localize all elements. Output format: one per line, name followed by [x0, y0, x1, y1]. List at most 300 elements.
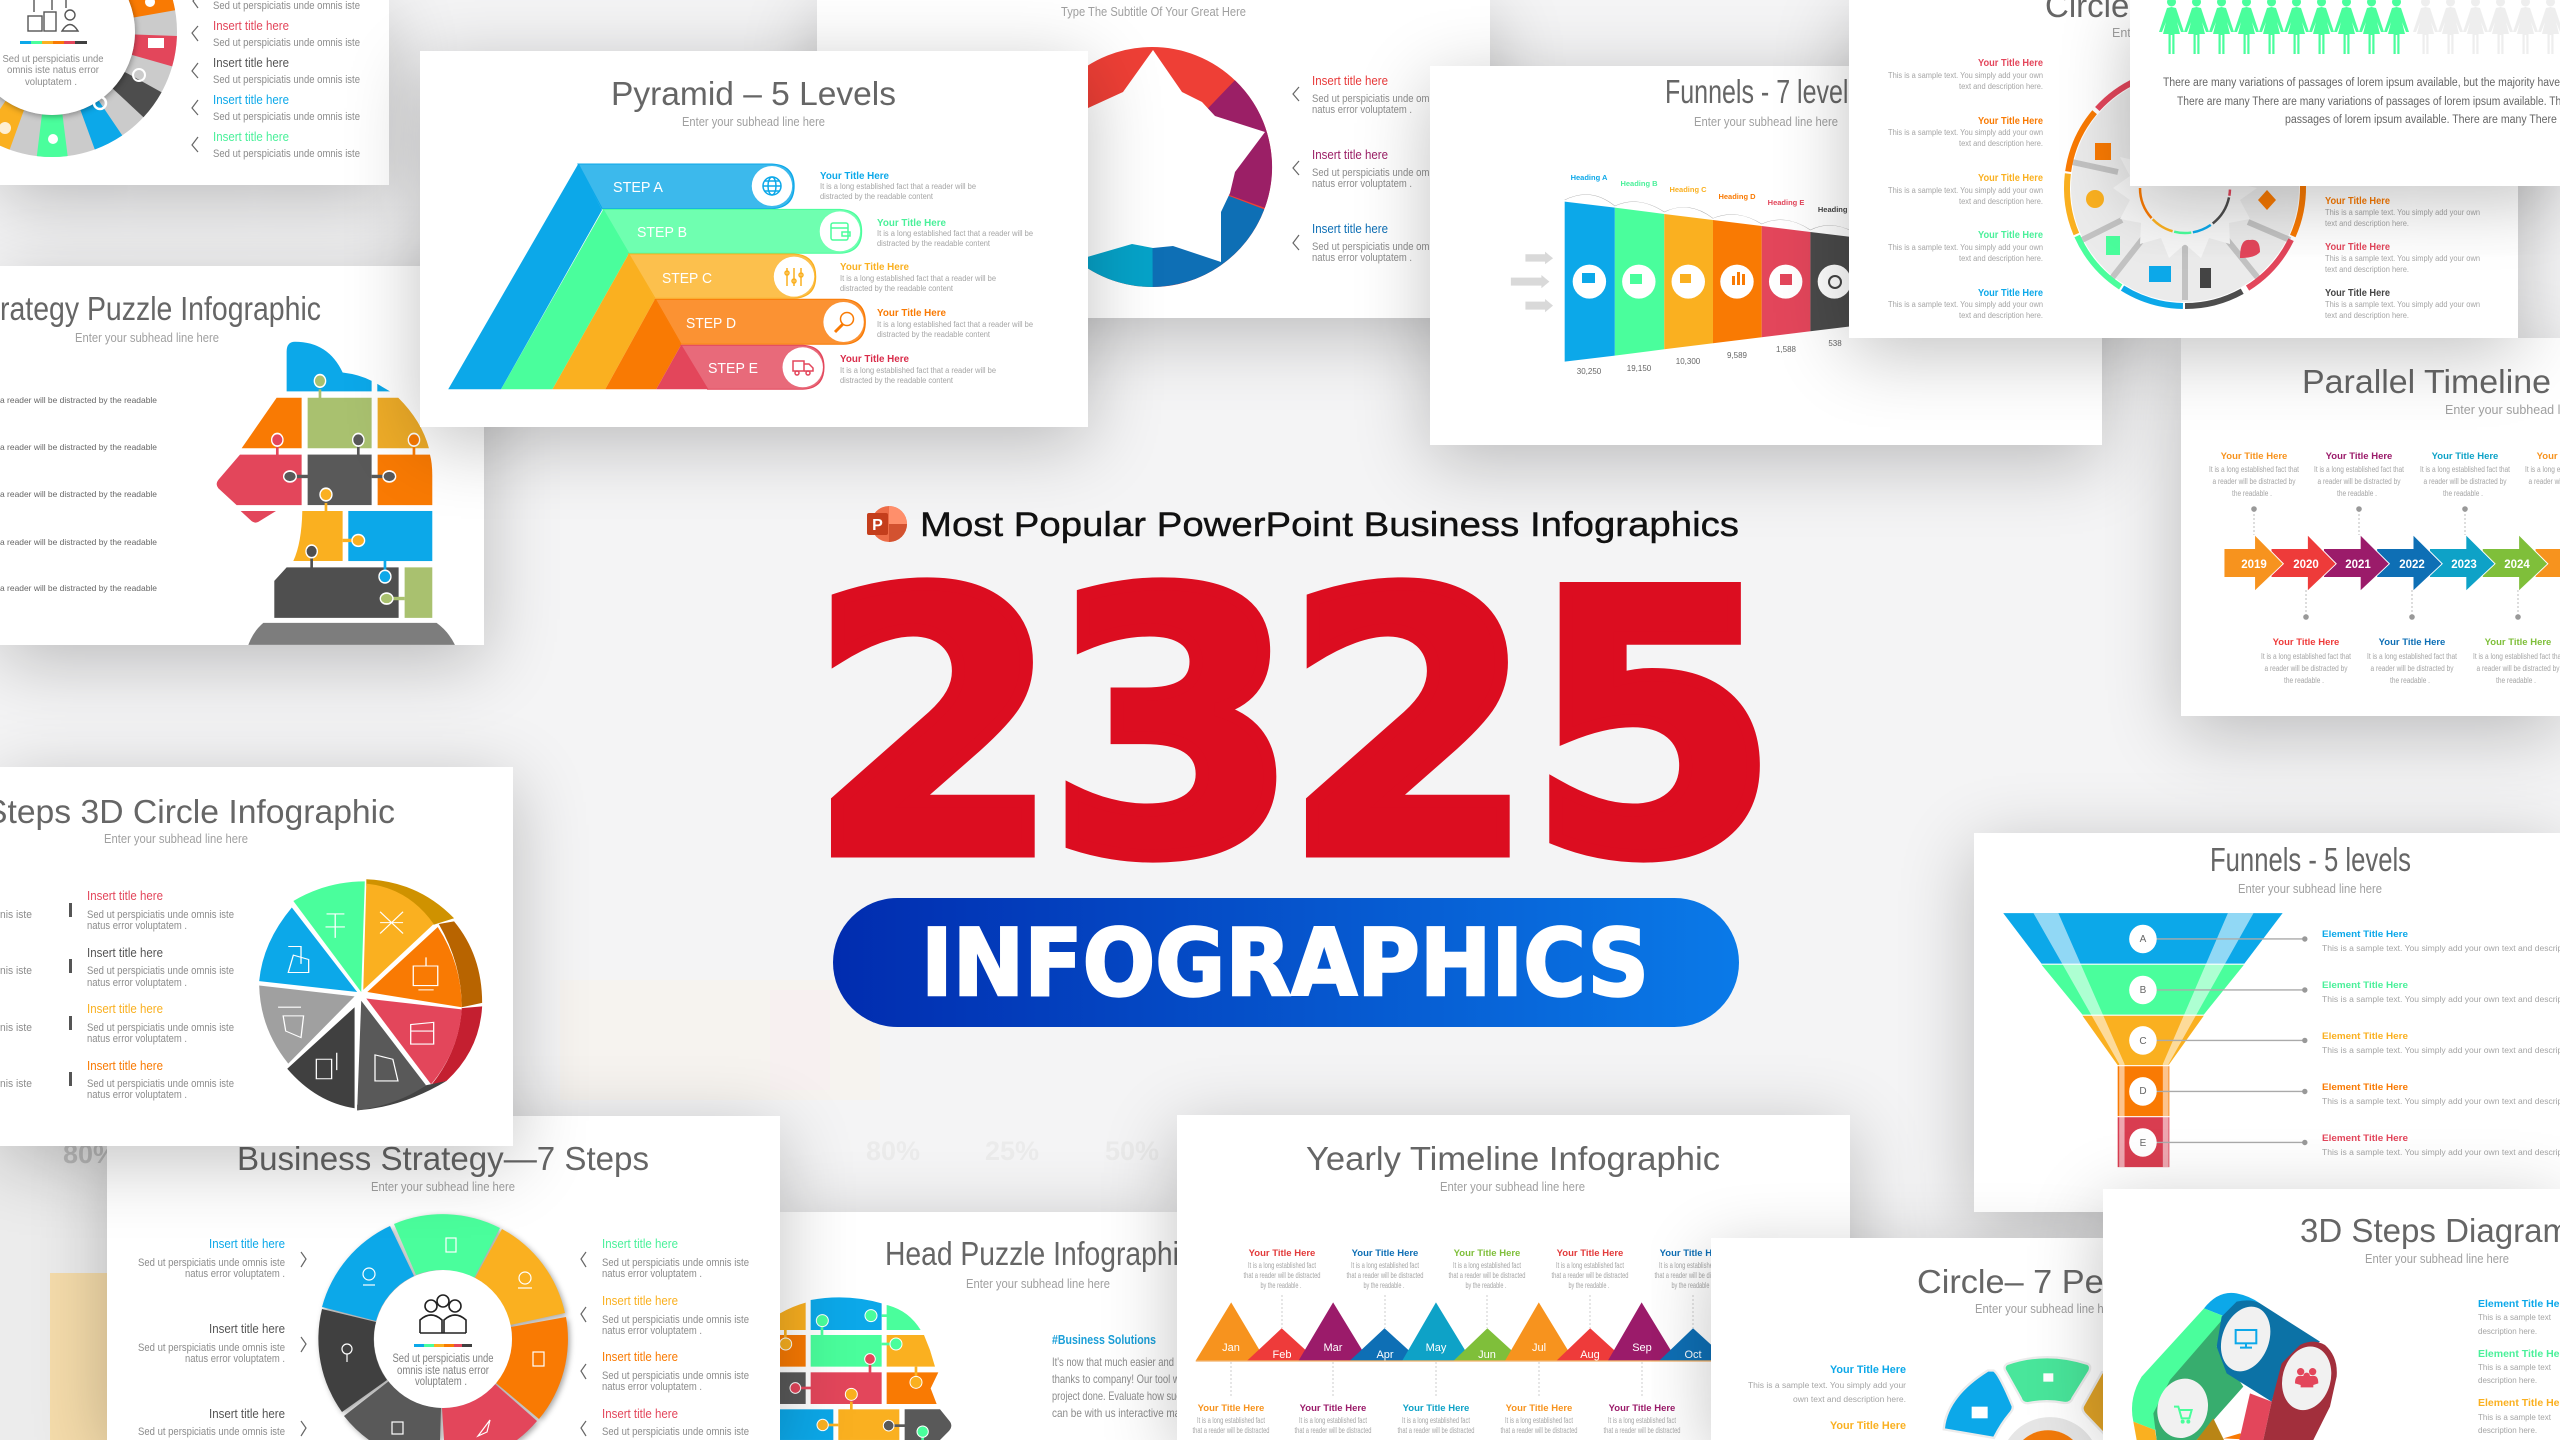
text list: Insert title here: [87, 1002, 163, 1016]
text list: Your Title Here: [1830, 1364, 1906, 1376]
bottom text blocks: that a reader will be distracted: [1398, 1426, 1474, 1435]
heading labels: Heading C: [1669, 185, 1707, 194]
bottom text blocks: Your Title Here: [2273, 637, 2339, 648]
text list with chevrons: Insert title here: [1312, 74, 1388, 88]
text list with chevrons: Insert title here: [213, 19, 289, 33]
text block: #Business Solutions: [1052, 1332, 1156, 1347]
chart: petals: [1945, 1358, 2107, 1440]
chart: segmented ring: [0, 0, 196, 176]
text list: natus error voluptatem .: [87, 1033, 187, 1045]
top text blocks: It is a long established fact: [1659, 1261, 1728, 1270]
top text blocks: the readable .: [2443, 489, 2483, 498]
right text list: [2325, 195, 2480, 320]
month labels: Mar: [1324, 1342, 1343, 1354]
panel: strategy puzzle slide: [0, 266, 484, 645]
center text: [392, 1353, 494, 1388]
text lines: a reader will be distracted by the readable: [0, 442, 157, 452]
step text: E: [840, 353, 997, 385]
step labels: [613, 179, 758, 377]
top text blocks: It is a long established fact that: [2420, 465, 2511, 474]
left text list: natus error voluptatem .: [185, 1353, 285, 1365]
top text blocks: a reader will be distracted by: [2212, 477, 2296, 486]
text list: [2478, 1298, 2560, 1435]
panel: head puzzle slide: [780, 1212, 1177, 1440]
month labels: Jul: [1532, 1342, 1546, 1354]
chart: star circle: [1040, 50, 1265, 262]
text list with chevrons: Insert title here: [1312, 222, 1388, 236]
subhead: Enter your subhead line here: [1440, 1180, 1585, 1194]
top text blocks: Your Title Here: [1557, 1248, 1623, 1259]
chart: 3D pie: [259, 879, 482, 1110]
top text blocks: that a reader will be distracted: [1654, 1271, 1732, 1280]
top text blocks: [1244, 1248, 1732, 1290]
text list with chevrons: Sed ut perspiciatis unde omnis iste: [213, 148, 360, 160]
step text: C: It is a long established fact that a reader will be: [840, 274, 997, 283]
left text list: text and description here.: [1959, 82, 2043, 91]
year labels: 2024: [2504, 559, 2530, 571]
step text: A: Your Title Here: [820, 170, 889, 182]
right text list: Insert title here: [602, 1294, 678, 1308]
text list with chevrons: Sed ut perspiciatis unde omnis iste: [213, 74, 360, 86]
text list: This is a sample text: [2478, 1363, 2552, 1372]
top text blocks: It is a long established fact: [1351, 1261, 1420, 1270]
left text list: [138, 1237, 306, 1438]
text list with chevrons: Sed ut perspiciatis unde omnis iste: [1312, 167, 1459, 179]
text list with chevrons: Sed ut perspiciatis unde omnis iste: [1312, 93, 1459, 105]
chart: people row: [2159, 0, 2560, 54]
left text list: text and description here.: [1959, 254, 2043, 263]
step text: A: It is a long established fact that a reader will be: [820, 182, 977, 191]
text lines: [0, 395, 157, 593]
step text: C: [840, 261, 997, 293]
value labels: 1,588: [1776, 345, 1797, 354]
right text list: natus error voluptatem .: [602, 1381, 702, 1393]
text list with chevrons: Insert title here: [213, 130, 289, 144]
clipped left text: [0, 909, 32, 1090]
bottom text blocks: a reader will be distracted by: [2370, 664, 2454, 673]
text lines: a reader will be distracted by the readable: [0, 489, 157, 499]
right text list: Insert title here: [602, 1407, 678, 1421]
text list with chevrons: Insert title here: [1312, 148, 1388, 162]
year labels: 2020: [2293, 559, 2319, 571]
step text: C: Your Title Here: [840, 261, 909, 273]
funnel letters: B: [2140, 985, 2147, 996]
title: Pyramid – 5 Levels: [611, 75, 896, 112]
bottom text blocks: It is a long established fact: [1505, 1416, 1574, 1425]
text list with chevrons: natus error voluptatem .: [1312, 104, 1412, 116]
subhead: Enter your subhead line here: [2365, 1252, 2509, 1266]
bottom text blocks: Your Title Here: [2485, 637, 2551, 648]
left text list: Insert title here: [209, 1407, 285, 1421]
brace line: [1565, 195, 1860, 236]
text lines: a reader will be distracted by the readable: [0, 583, 157, 593]
ring icons: [342, 1238, 544, 1436]
title: Funnels - 5 levels: [2210, 841, 2411, 878]
top text blocks: Your Title Here: [2432, 451, 2498, 462]
icon: PowerPoint logo: P: [872, 517, 883, 534]
subhead: Enter your subhead line here: [371, 1180, 515, 1194]
bottom text blocks: It is a long established fact: [1608, 1416, 1677, 1425]
center text: Sed ut perspiciatis unde: [392, 1353, 494, 1365]
top text blocks: Your Title Here: [2221, 451, 2287, 462]
step text: D: It is a long established fact that a reader will be: [877, 320, 1034, 329]
heading labels: Heading B: [1620, 179, 1658, 188]
top text blocks: that a reader will be distracted: [1552, 1271, 1628, 1280]
text list with chevrons: natus error voluptatem .: [1312, 178, 1412, 190]
funnel letters: D: [2139, 1086, 2147, 1097]
funnel text list: [2322, 929, 2560, 1157]
subtitle: Type The Subtitle Of Your Great Here: [1061, 5, 1246, 19]
title: rategy Puzzle Infographic: [0, 290, 321, 327]
value labels: 19,150: [1627, 364, 1652, 373]
bottom text blocks: Your Title Here: [1506, 1403, 1572, 1414]
chart: arrow timeline: [2224, 535, 2560, 591]
separators: [69, 903, 72, 1086]
left text list: Your Title Here: [1978, 115, 2043, 127]
step text: A: distracted by the readable content: [820, 192, 934, 201]
month labels: Jan: [1222, 1342, 1240, 1354]
year labels: 2023: [2451, 559, 2477, 571]
heading: Most Popular PowerPoint Business Infographics: [920, 506, 1739, 544]
bottom text blocks: that a reader will be distracted: [1500, 1426, 1578, 1435]
right text list: This is a sample text. You simply add your own: [2325, 208, 2480, 217]
funnel letters: [2139, 934, 2147, 1149]
left text list: Your Title Here: [1978, 229, 2043, 241]
subhead: Enter your subhead line here: [966, 1277, 1110, 1291]
year labels: 2019: [2241, 559, 2267, 571]
panel: funnels 5 levels slide: [1974, 833, 2560, 1212]
chart: 3D steps: [2132, 1293, 2338, 1440]
step text: B: distracted by the readable content: [877, 239, 991, 248]
top text blocks: by the readable .: [1672, 1281, 1712, 1290]
text list: Sed ut perspiciatis unde omnis iste: [87, 1078, 234, 1090]
value labels: 10,300: [1676, 357, 1701, 366]
left text list: text and description here.: [1959, 139, 2043, 148]
background faded shapes: 80%: [63, 1139, 117, 1169]
title: Yearly Timeline Infographic: [1306, 1140, 1720, 1177]
step text: D: [877, 307, 1034, 339]
text list with chevrons: [1293, 74, 1459, 264]
panel: people pictogram slide: [2130, 0, 2560, 186]
background faded shapes: 50%: [1105, 1136, 1159, 1166]
step labels: STEP E: [708, 360, 758, 377]
text lines: a reader will be distracted by the readable: [0, 395, 157, 405]
ring icons: [2086, 143, 2276, 288]
top text blocks: a reader will be distracted by: [2424, 477, 2506, 486]
top text blocks: Your Title Here: [1352, 1248, 1418, 1259]
right text list: Sed ut perspiciatis unde omnis iste: [602, 1370, 749, 1382]
top text blocks: by the readable .: [1466, 1281, 1506, 1290]
clipped left text: nis iste: [0, 1022, 32, 1034]
left text list: Sed ut perspiciatis unde omnis iste: [138, 1426, 285, 1438]
panel: parallel timeline slide: [2181, 338, 2560, 716]
month labels: Aug: [1580, 1349, 1600, 1361]
top text blocks: Your Title Here: [1660, 1248, 1726, 1259]
top text blocks: by the readable .: [1568, 1281, 1610, 1290]
center text: [2, 53, 104, 88]
left text list: natus error voluptatem .: [185, 1268, 285, 1280]
icon: team: [420, 1295, 466, 1333]
pill banner: INFOGRAPHICS: [921, 909, 1649, 1017]
left text list: Insert title here: [209, 1322, 285, 1336]
bottom text blocks: [2261, 637, 2560, 685]
step labels: STEP D: [686, 315, 736, 332]
left text list: Sed ut perspiciatis unde omnis iste: [138, 1257, 285, 1269]
panel: business strategy 7 steps slide: [107, 1116, 780, 1440]
funnel text list: Element Title Here: [2322, 1133, 2408, 1144]
chart: funnel: [2003, 913, 2307, 1167]
right text list: This is a sample text. You simply add your own: [2325, 254, 2480, 263]
step labels: STEP A: [613, 179, 663, 196]
month labels: [1222, 1342, 1702, 1361]
panel: 3D circle slide: [0, 767, 513, 1146]
icon: people: [2295, 1368, 2318, 1387]
panel: circle 7 petals slide: [1711, 1238, 2103, 1440]
top text blocks: that a reader will be distracted: [1346, 1271, 1424, 1280]
text list with chevrons: Insert title here: [213, 56, 289, 70]
funnel text list: Element Title Here: [2322, 980, 2408, 991]
chart: pyramid bars: [448, 164, 865, 389]
color bar: [414, 1344, 472, 1347]
input arrows: [1511, 252, 1553, 312]
step labels: STEP B: [637, 224, 687, 241]
text list: own text and description here.: [1793, 1395, 1906, 1404]
step labels: STEP C: [662, 270, 712, 287]
left text list: Sed ut perspiciatis unde omnis iste: [138, 1342, 285, 1354]
text list: description here.: [2478, 1327, 2537, 1336]
bottom text blocks: It is a long established fact that: [2367, 652, 2458, 661]
text list with chevrons: Sed ut perspiciatis unde omnis iste: [213, 37, 360, 49]
bottom text blocks: Your Title Here: [2379, 637, 2445, 648]
panel: yearly timeline slide: [1177, 1115, 1850, 1440]
text list: description here.: [2478, 1376, 2537, 1385]
icon: people and target: [28, 0, 78, 31]
month labels: May: [1426, 1342, 1447, 1354]
step text: A: [820, 170, 977, 201]
value labels: [1577, 339, 1842, 376]
panel: funnels 7 levels slide: [1430, 66, 2102, 445]
funnel letters: C: [2139, 1036, 2147, 1047]
text list with chevrons: Insert title here: [213, 93, 289, 107]
text list: natus error voluptatem .: [87, 977, 187, 989]
top text blocks: that a reader will be distracted: [1244, 1271, 1320, 1280]
bottom text blocks: the readable .: [2390, 676, 2430, 685]
connector stems: [2251, 506, 2521, 620]
top text blocks: It is a long established fact: [1248, 1261, 1317, 1270]
connector lines: [1231, 1295, 1693, 1396]
title: Funnels - 7 levels: [1665, 73, 1861, 110]
value labels: 30,250: [1577, 367, 1602, 376]
right text list: Your Title Here: [2325, 287, 2390, 299]
bottom text blocks: It is a long established fact: [1299, 1416, 1368, 1425]
text list with chevrons: Sed ut perspiciatis unde omnis iste: [213, 0, 360, 12]
step text: C: distracted by the readable content: [840, 284, 954, 293]
panel: top-left ring slide: [0, 0, 389, 185]
color bar: [20, 41, 87, 44]
top text blocks: It is a long established fact: [1556, 1261, 1625, 1270]
bottom text blocks: Your Title Here: [1609, 1403, 1675, 1414]
heading labels: Heading A: [1571, 173, 1608, 182]
subhead: Enter your subhead line here: [2238, 882, 2382, 896]
text list: description here.: [2478, 1426, 2537, 1435]
text list: [87, 889, 234, 1101]
step text: E: It is a long established fact that a reader will be: [840, 366, 997, 375]
year labels: [2241, 559, 2530, 571]
panel: circle slide top right: [1849, 0, 2518, 338]
background faded shapes: 25%: [985, 1136, 1039, 1166]
chart: knight puzzle: [217, 342, 455, 645]
value labels: 9,589: [1727, 351, 1748, 360]
chart: funnel bands: [1511, 195, 1860, 362]
chart: head puzzle: [780, 1297, 951, 1440]
left text list: Insert title here: [209, 1237, 285, 1251]
text block: [1052, 1332, 1210, 1420]
pie icons: [278, 912, 438, 1081]
step text: E: Your Title Here: [840, 353, 909, 365]
left text list: [1888, 57, 2043, 320]
text list: This is a sample text. You simply add your: [1748, 1381, 1906, 1390]
text lines: a reader will be distracted by the readable: [0, 537, 157, 547]
top text blocks: It is a long established fact that: [2209, 465, 2300, 474]
petal icons: [2043, 1373, 2053, 1382]
right text list: Insert title here: [602, 1237, 678, 1251]
subhead: Enter your subhead line here: [75, 331, 219, 345]
heading labels: Heading E: [1768, 198, 1804, 207]
big number: 2325: [809, 517, 1778, 936]
text list: [1748, 1364, 1906, 1432]
left text list: This is a sample text. You simply add your own: [1888, 128, 2043, 137]
funnel text list: Element Title Here: [2322, 1082, 2408, 1093]
subhead: Enter your subhead line here: [1694, 115, 1838, 129]
funnel letters: E: [2140, 1138, 2147, 1149]
top text blocks: Your Title Here: [2326, 451, 2392, 462]
center text: voluptatem .: [25, 76, 77, 88]
paragraph: [2163, 77, 2560, 126]
chart: gear ring: [2018, 21, 2352, 355]
inner ring: [2121, 124, 2249, 252]
heading labels: Heading D: [1718, 192, 1756, 201]
top text blocks: It is a long established fact that: [2314, 465, 2405, 474]
step text: B: [877, 217, 1034, 248]
heading labels: Heading F: [1818, 205, 1855, 214]
year labels: 2021: [2345, 559, 2371, 571]
funnel text list: Element Title Here: [2322, 929, 2408, 940]
right text list: Sed ut perspiciatis unde omnis iste: [602, 1257, 749, 1269]
center text: omnis iste natus error: [397, 1365, 489, 1377]
clipped left text: nis iste: [0, 1078, 32, 1090]
bottom text blocks: [1192, 1403, 1680, 1435]
icon: PowerPoint logo: [867, 506, 907, 542]
right text list: Sed ut perspiciatis unde omnis iste: [602, 1314, 749, 1326]
text list with chevrons: [192, 0, 360, 160]
subhead: Enter your subhead line here: [104, 832, 248, 846]
text list: natus error voluptatem .: [87, 1089, 187, 1101]
month labels: Jun: [1478, 1349, 1496, 1361]
month labels: Sep: [1632, 1342, 1652, 1354]
bottom text blocks: It is a long established fact that: [2261, 652, 2352, 661]
text list: This is a sample text: [2478, 1413, 2552, 1422]
text list with chevrons: Sed ut perspiciatis unde omnis iste: [1312, 241, 1459, 253]
bottom text blocks: It is a long established fact: [1402, 1416, 1471, 1425]
month labels: Feb: [1273, 1349, 1291, 1361]
right text list: natus error voluptatem .: [602, 1268, 702, 1280]
step text: E: distracted by the readable content: [840, 376, 954, 385]
heading labels: [1571, 173, 1855, 214]
text list with chevrons: Sed ut perspiciatis unde omnis iste: [213, 111, 360, 123]
center text: voluptatem .: [415, 1376, 467, 1388]
left text list: This is a sample text. You simply add your own: [1888, 71, 2043, 80]
top text blocks: [2209, 451, 2560, 498]
bottom text blocks: Your Title Here: [1198, 1403, 1264, 1414]
right text list: Your Title Here: [2325, 241, 2390, 253]
top text blocks: by the readable .: [1364, 1281, 1404, 1290]
top text blocks: a reader will be distracted by: [2318, 477, 2400, 486]
funnel text list: Element Title Here: [2322, 1031, 2408, 1042]
step text: B: Your Title Here: [877, 217, 946, 229]
month labels: Apr: [1376, 1349, 1394, 1361]
value labels: 538: [1828, 339, 1842, 348]
left text list: This is a sample text. You simply add your own: [1888, 300, 2043, 309]
step icons: [763, 177, 854, 375]
right text list: natus error voluptatem .: [602, 1325, 702, 1337]
step text: D: distracted by the readable content: [877, 330, 991, 339]
right text list: text and description here.: [2325, 219, 2409, 228]
center text: Sed ut perspiciatis unde: [2, 53, 104, 65]
clipped left text: nis iste: [0, 965, 32, 977]
bottom text blocks: Your Title Here: [1403, 1403, 1469, 1414]
icon: monitor: [2236, 1330, 2256, 1348]
text list: Sed ut perspiciatis unde omnis iste: [87, 965, 234, 977]
right text list: Sed ut perspiciatis unde omnis iste: [602, 1426, 749, 1438]
step text: D: Your Title Here: [877, 307, 946, 319]
funnel letters: A: [2140, 934, 2147, 945]
band icons: [1582, 272, 1841, 288]
icons on ring: [0, 0, 164, 144]
puzzle knobs: [780, 1310, 928, 1440]
bottom text blocks: Your Title Here: [1300, 1403, 1366, 1414]
panel: 3D steps diagram slide: [2103, 1189, 2560, 1440]
top text blocks: Your Title Here: [1454, 1248, 1520, 1259]
title: Parallel Timeline: [2302, 363, 2551, 400]
top text blocks: that a reader will be distracted: [1448, 1271, 1526, 1280]
icon: cart: [2174, 1407, 2192, 1423]
right text list: This is a sample text. You simply add your own: [2325, 300, 2480, 309]
top text blocks: the readable .: [2232, 489, 2272, 498]
text list: Insert title here: [87, 889, 163, 903]
chart: month triangles: [1196, 1302, 1728, 1362]
bottom text blocks: the readable .: [2284, 676, 2324, 685]
chart: 7-step ring: [318, 1214, 568, 1440]
right text list: text and description here.: [2325, 311, 2409, 320]
panel: star circle slide: [817, 0, 1490, 318]
center text: omnis iste natus error: [7, 64, 99, 76]
text list: Your Title Here: [1830, 1420, 1906, 1432]
right text list: [581, 1237, 749, 1438]
puzzle knobs: [272, 375, 420, 604]
background faded shapes: 80%: [866, 1136, 920, 1166]
text list: Sed ut perspiciatis unde omnis iste: [87, 1022, 234, 1034]
right text list: Your Title Here: [2325, 195, 2390, 207]
panel: pyramid slide: [420, 51, 1088, 427]
right text list: Insert title here: [602, 1350, 678, 1364]
text list: natus error voluptatem .: [87, 920, 187, 932]
top text blocks: It is a long established fact: [1453, 1261, 1522, 1270]
right text list: text and description here.: [2325, 265, 2409, 274]
bottom text blocks: that a reader will be distracted: [1294, 1426, 1372, 1435]
top text blocks: the readable .: [2337, 489, 2377, 498]
title: Business Strategy—7 Steps: [237, 1140, 649, 1177]
step text: B: It is a long established fact that a reader will be: [877, 229, 1034, 238]
